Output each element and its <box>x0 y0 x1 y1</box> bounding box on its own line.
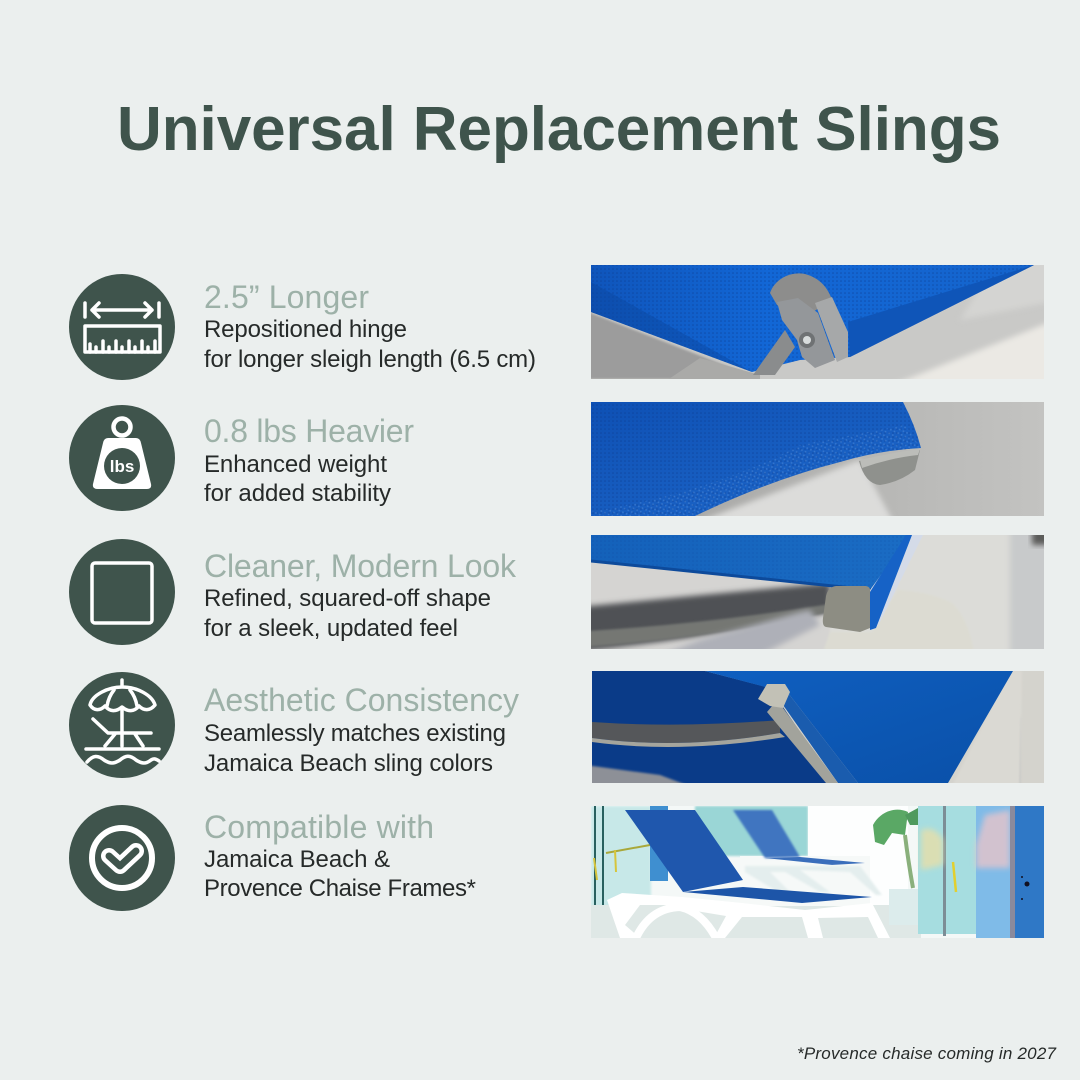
photo: sling mesh close-up <box>591 402 1044 525</box>
text: 0.8 lbs heavier: Enhanced weight <box>204 451 387 478</box>
text: compatible with: Compatible with <box>204 809 434 845</box>
text: compatible with: Jamaica Beach & <box>204 846 390 873</box>
icon: ruler with length arrow <box>69 274 175 380</box>
row 5: compatible with <box>69 805 1044 938</box>
text: cleaner modern look: Refined, squared-off shape <box>204 585 491 612</box>
row 4: aesthetic consistency <box>69 671 1044 790</box>
text: cleaner modern look <box>204 548 517 642</box>
text: aesthetic consistency: Seamlessly matches existing <box>204 720 506 747</box>
text: aesthetic consistency: Aesthetic Consistency <box>204 682 519 718</box>
text: 2.5 inch longer <box>204 279 536 373</box>
photo: poolside chaise loungers <box>591 806 1044 938</box>
icon: weight <box>69 405 175 511</box>
text: aesthetic consistency: Jamaica Beach sling colors <box>204 750 493 777</box>
text: 2.5 inch longer: for longer sleigh length (6.5 cm) <box>204 346 536 373</box>
text: 2.5 inch longer: 2.5” Longer <box>204 279 369 315</box>
footnote: *Provence chaise coming in 2027 <box>797 1044 1057 1063</box>
text: aesthetic consistency <box>204 682 519 777</box>
row 3: cleaner modern look <box>69 535 1044 649</box>
photo: sling colour match <box>585 671 1044 790</box>
title: Universal Replacement Slings <box>117 95 1001 164</box>
row 2: 0.8 lbs heavier <box>69 402 1044 525</box>
text: 0.8 lbs heavier: 0.8 lbs Heavier <box>204 413 414 449</box>
icon: square <box>69 539 175 645</box>
text: 0.8 lbs heavier: for added stability <box>204 480 391 507</box>
icon: check mark in circle <box>69 805 175 911</box>
text: cleaner modern look: for a sleek, updated feel <box>204 615 458 642</box>
text: compatible with: Provence Chaise Frames* <box>204 875 476 902</box>
text: cleaner modern look: Cleaner, Modern Look <box>204 548 517 584</box>
text: compatible with <box>204 809 476 902</box>
row 1: 2.5 inch longer <box>69 265 1044 380</box>
photo: repositioned hinge <box>591 265 1044 379</box>
text: 2.5 inch longer: Repositioned hinge <box>204 316 407 343</box>
icon: weight: lbs <box>110 457 134 476</box>
photo: squared-off end cap <box>591 535 1044 649</box>
text: 0.8 lbs heavier <box>204 413 414 507</box>
icon: beach umbrella and lounger <box>69 672 175 778</box>
